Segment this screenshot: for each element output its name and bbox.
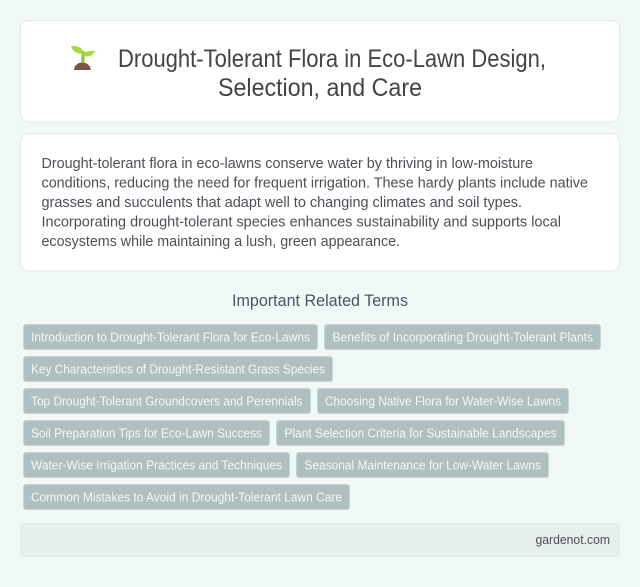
tag: seasonal maintenance: Seasonal Maintenance for Low-Water Lawns <box>304 458 541 472</box>
text block: description <box>42 155 588 250</box>
text block: description: conditions, reducing the need for frequent irrigation. These hardy plants include native <box>42 174 588 192</box>
tag: native flora <box>318 388 568 414</box>
tag: key characteristics <box>24 356 332 382</box>
tag: introduction <box>24 324 318 350</box>
tag: groundcovers <box>24 388 310 414</box>
tag: seasonal maintenance <box>296 452 548 478</box>
heading <box>118 45 546 102</box>
tag: plant selection: Plant Selection Criteria for Sustainable Landscapes <box>284 426 556 440</box>
text block: description: Drought-tolerant flora in eco-lawns conserve water by thriving in low-moisture <box>42 155 533 172</box>
tag: native flora: Choosing Native Flora for Water-Wise Lawns <box>325 394 561 408</box>
heading: Selection, and Care <box>218 74 422 102</box>
tag: soil preparation: Soil Preparation Tips for Eco-Lawn Success <box>31 426 262 440</box>
tag: common mistakes: Common Mistakes to Avoid in Drought-Tolerant Lawn Care <box>31 490 342 504</box>
tag: key characteristics: Key Characteristics of Drought-Resistant Grass Species <box>31 362 325 376</box>
panel: description <box>20 134 620 271</box>
tag: common mistakes <box>24 484 350 510</box>
tag: plant selection <box>276 420 564 446</box>
heading: related terms: Important Related Terms <box>232 292 408 310</box>
text block: description: ecosystems while maintaining a lush, green appearance. <box>42 233 400 250</box>
tag: benefits: Benefits of Incorporating Drought-Tolerant Plants <box>332 330 593 344</box>
tag: irrigation <box>24 452 290 478</box>
tag: groundcovers: Top Drought-Tolerant Groundcovers and Perennials <box>31 394 302 408</box>
footer: gardenot.com <box>536 532 610 547</box>
footer <box>20 523 620 557</box>
tag: soil preparation <box>24 420 270 446</box>
tag: benefits <box>324 324 600 350</box>
tag: irrigation: Water-Wise Irrigation Practices and Techniques <box>31 458 282 472</box>
tag list <box>24 324 600 510</box>
panel: title card <box>20 20 620 122</box>
text block: description: Incorporating drought-tolerant species enhances sustainability and supports local <box>42 214 561 230</box>
icon: seedling <box>71 46 95 70</box>
heading: Drought-Tolerant Flora in Eco-Lawn Design, <box>118 45 546 73</box>
tag: introduction: Introduction to Drought-Tolerant Flora for Eco-Lawns <box>31 330 310 344</box>
text block: description: grasses and succulents that adapt well to changing climates and soil types. <box>42 194 522 211</box>
